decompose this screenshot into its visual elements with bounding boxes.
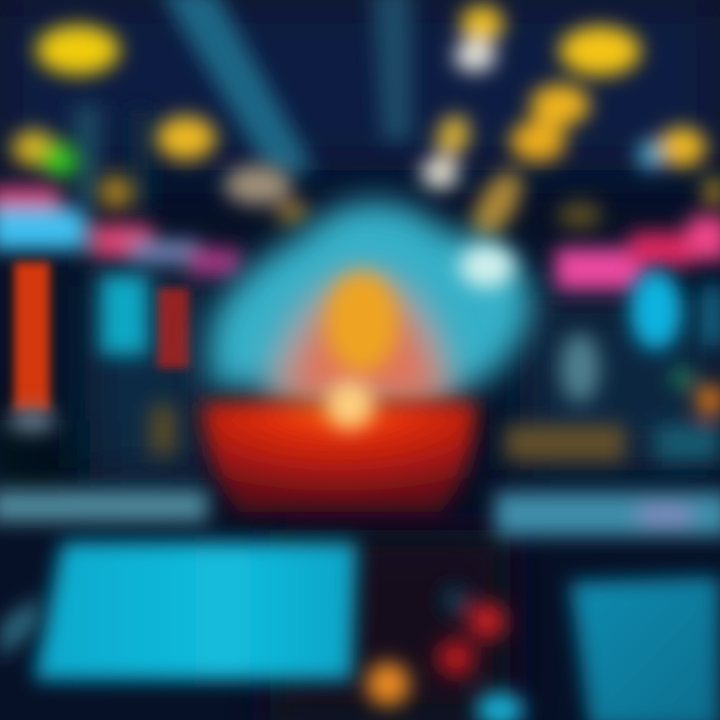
dome highlight xyxy=(459,244,515,288)
left neon signs xyxy=(0,186,240,276)
counter bands xyxy=(0,490,720,536)
dome outer arc xyxy=(208,201,532,388)
ceiling lights xyxy=(12,5,720,247)
left columns xyxy=(14,262,189,412)
red bowl xyxy=(202,381,476,512)
console buttons xyxy=(366,586,524,720)
left edge strip xyxy=(0,595,38,660)
ceiling beams xyxy=(72,0,412,210)
dome xyxy=(208,201,532,400)
flame xyxy=(326,272,398,372)
right columns and lights xyxy=(505,270,720,461)
right neon signs xyxy=(555,216,720,290)
lower right cyan panel xyxy=(570,576,720,720)
dome inner glow xyxy=(262,268,458,398)
lower left cyan panel xyxy=(34,542,357,680)
bowl glow xyxy=(326,381,374,429)
